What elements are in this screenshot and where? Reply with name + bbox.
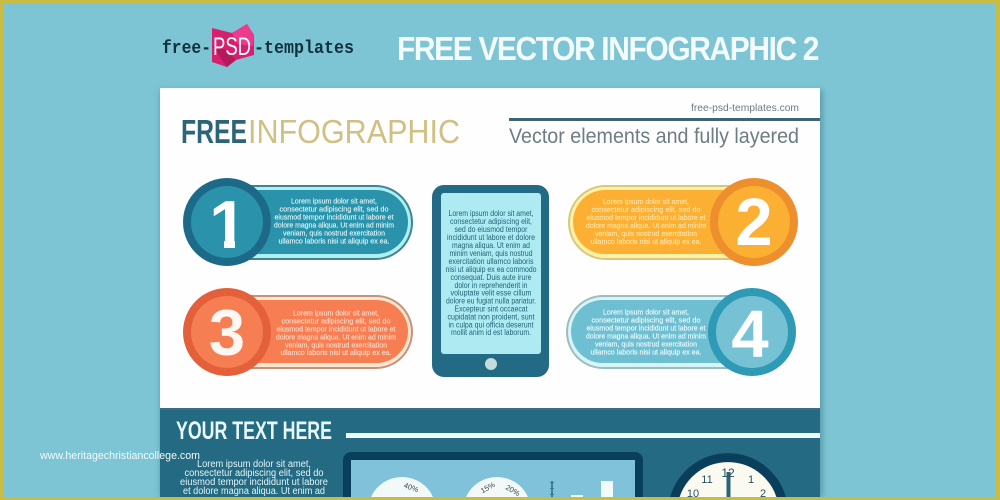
pie chart 2 [466, 477, 528, 498]
card 3 text: Lorem ipsum dolor sit amet, [293, 308, 379, 318]
phone illustration [432, 185, 549, 377]
phone text: magna aliqua. Ut enim ad [452, 241, 530, 250]
phone text: cupidatat non proident, sunt [448, 312, 535, 322]
band body text: eiusmod tempor incididunt ut labore [180, 477, 328, 488]
card 3 [183, 288, 413, 376]
band body text [180, 459, 328, 497]
card 3 text: consectetur adipiscing elit, sed do [282, 316, 390, 326]
pie chart 2: 15% [479, 480, 497, 495]
clock: 2 [760, 488, 766, 500]
phone text: exercitation ullamco laboris [448, 257, 534, 266]
phone text [446, 209, 537, 337]
bar chart [550, 481, 613, 497]
phone text: voluptate velit esse cillum [450, 288, 532, 298]
card 4 text [586, 308, 706, 356]
panel: white infographic sheet [160, 88, 820, 409]
phone text: dolor in reprehenderit in [454, 281, 528, 290]
card 4 text: ullamco laboris nisi ut aliquip ex ea. [590, 348, 702, 356]
tablet with charts [343, 452, 643, 498]
pie chart 2: 20% [504, 483, 522, 498]
clock: 10 [687, 488, 699, 500]
header rule [509, 118, 820, 121]
card 3 text: dolore magna aliqua. Ut enim ad minim [276, 332, 396, 342]
card 2 text: ullamco laboris nisi ut aliquip ex ea. [590, 237, 702, 246]
logo: free-PSD-templates: PSD [213, 33, 251, 61]
card 3 text: veniam, quis nostrud exercitation [285, 340, 387, 350]
card 2 text: veniam, quis nostrud exercitation [595, 229, 697, 238]
pie chart 1 [371, 477, 433, 497]
phone text: consequat. Duis aute irure [450, 273, 532, 282]
card 2 text: consectetur adipiscing elit, sed do [592, 205, 700, 214]
logo: free-PSD-templates: -templates [254, 39, 354, 59]
title: FREE VECTOR INFOGRAPHIC 2 [397, 30, 819, 67]
phone text: nisi ut aliquip ex ea commodo [446, 265, 537, 274]
phone text: Excepteur sint occaecat [454, 304, 528, 314]
card 3: 3 [209, 296, 245, 369]
card 2 [568, 178, 798, 266]
card 3 text: ullamco laboris nisi ut aliquip ex ea. [280, 348, 392, 357]
card 1 text [274, 196, 394, 246]
clock [670, 453, 786, 500]
heading: your text here: YOUR TEXT HERE [176, 417, 332, 445]
card 4: 4 [731, 297, 769, 372]
paper shadow [160, 90, 823, 497]
subtitle: Vector elements and fully layered [509, 125, 799, 148]
card 1 [183, 178, 413, 266]
phone text: incididunt ut labore et dolore [447, 233, 535, 242]
logo: free-PSD-templates: free- [162, 39, 211, 59]
band body text: et dolore magna aliqua. Ut enim ad [183, 486, 325, 497]
card 1: 1 [209, 187, 247, 263]
band rule [346, 433, 820, 438]
card 2 text [586, 197, 706, 246]
clock: 1 [748, 474, 754, 486]
card 1 text: ullamco laboris nisi ut aliquip ex ea. [278, 236, 390, 246]
phone text: in culpa qui officia deserunt [448, 320, 534, 330]
phone text: dolore eu fugiat nulla pariatur. [446, 296, 536, 306]
band body text: Lorem ipsum dolor sit amet, [197, 459, 311, 470]
phone text: consectetur adipiscing elit, [450, 217, 532, 226]
card 1 text: consectetur adipiscing elit, sed do [280, 204, 388, 214]
card 4 text: dolore magna aliqua. Ut enim ad minim [586, 332, 706, 340]
phone text: mollit anim id est laborum. [451, 328, 531, 337]
card 2 text: dolore magna aliqua. Ut enim ad minim [586, 221, 706, 230]
band body text: consectetur adipiscing elit, sed do [184, 468, 324, 479]
card 4 text: Lorem ipsum dolor sit amet, [603, 308, 689, 316]
clock: 11 [701, 474, 713, 486]
card 1 text: veniam, quis nostrud exercitation [283, 228, 385, 238]
card 1 text: dolore magna aliqua. Ut enim ad minim [274, 220, 394, 230]
card 4 text: veniam, quis nostrud exercitation [595, 340, 697, 348]
panel: lower teal band [160, 408, 820, 497]
card 1 text: eiusmod tempor incididunt ut labore et [274, 212, 394, 222]
card 2 text: eiusmod tempor incididunt ut labore et [586, 213, 706, 222]
watermark url: www.heritagechristiancollege.com [39, 450, 200, 462]
card 3 text [276, 308, 396, 357]
heading: free infographic: FREE [181, 113, 247, 150]
card 2: 2 [735, 185, 773, 260]
card 1 text: Lorem ipsum dolor sit amet, [291, 196, 377, 206]
phone text: Lorem ipsum dolor sit amet, [448, 209, 534, 218]
phone text: minim veniam, quis nostrud [450, 249, 532, 258]
card 4 [566, 288, 796, 376]
card 4 text: consectetur adipiscing elit, sed do [592, 316, 700, 324]
pie chart 1: 40% [403, 481, 420, 494]
phone text: sed do eiusmod tempor [454, 225, 528, 234]
clock: 12 [721, 466, 735, 480]
heading: free infographic: INFOGRAPHIC [248, 113, 460, 150]
website label: free-psd-templates.com [691, 102, 799, 114]
logo: free-PSD-templates [162, 24, 354, 67]
card 2 text: Lorem ipsum dolor sit amet, [603, 197, 689, 206]
card 4 text: eiusmod tempor incididunt ut labore et [586, 324, 706, 332]
card 3 text: eiusmod tempor incididunt ut labore et [276, 324, 396, 334]
